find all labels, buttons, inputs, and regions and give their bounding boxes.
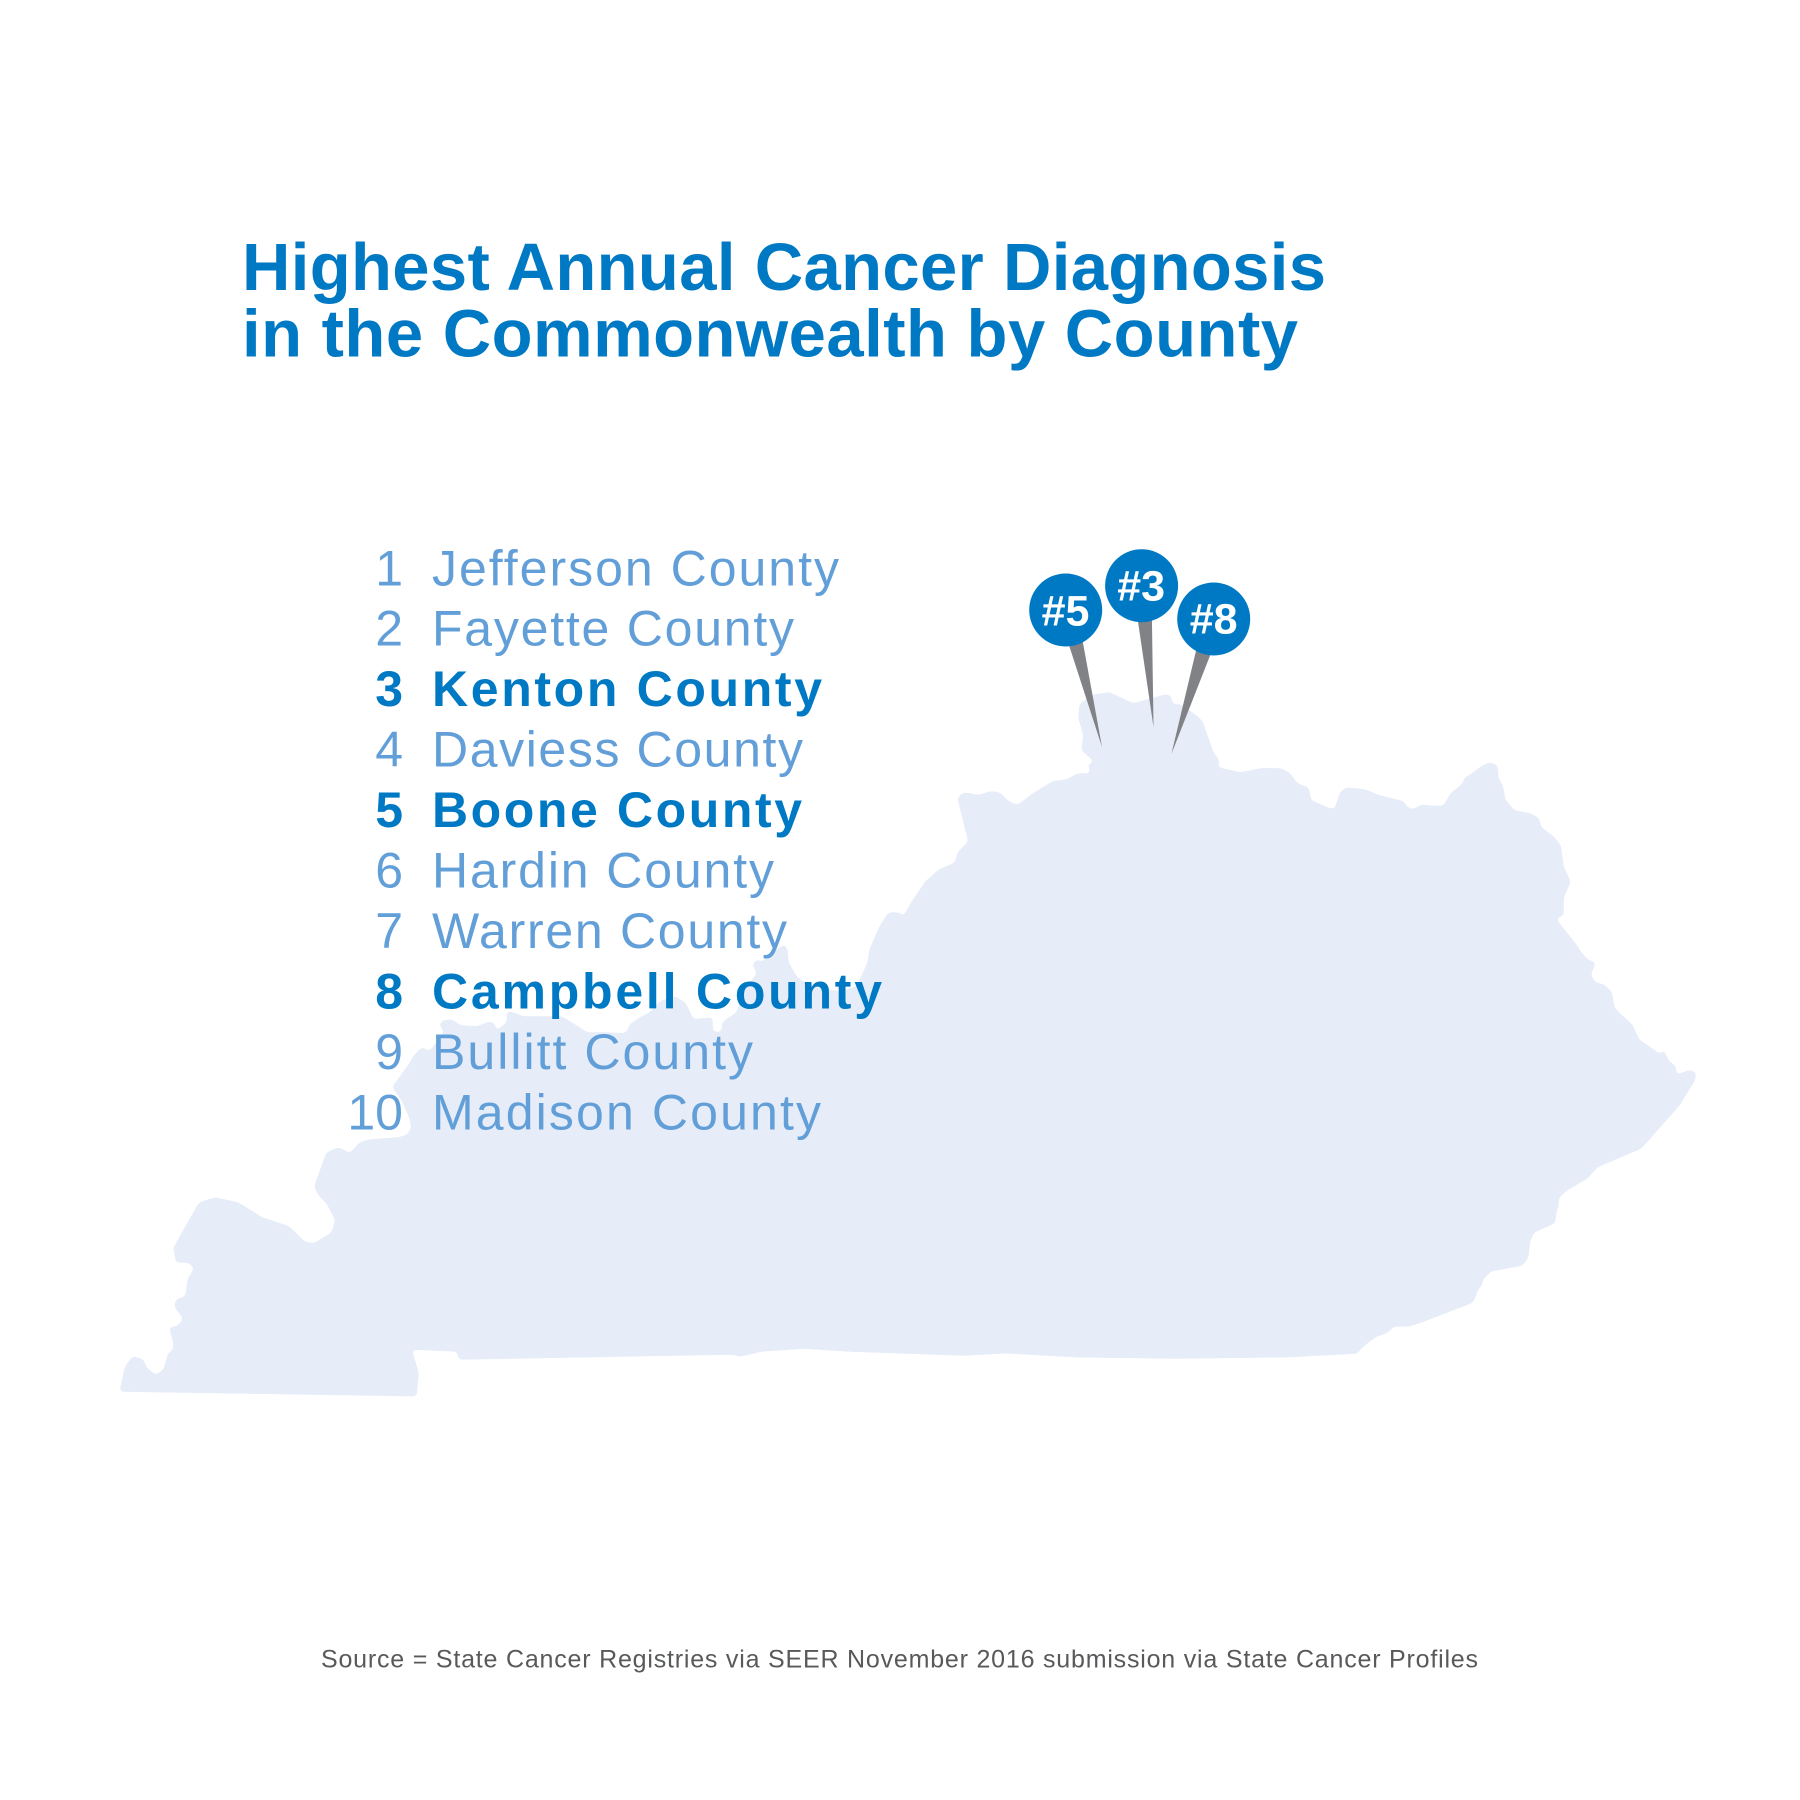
ranked county list	[347, 540, 882, 1140]
map pin: #8 Campbell: #8	[1190, 596, 1238, 644]
rank 10: Madison County: Madison County	[432, 1084, 821, 1140]
rank 6: Hardin County: Hardin County	[432, 842, 774, 898]
rank 10: Madison County: 10	[347, 1084, 403, 1140]
rank 2: Fayette County: 2	[375, 601, 403, 657]
title: in the Commonwealth by County	[242, 296, 1298, 372]
rank 5: Boone County: Boone County	[432, 782, 802, 838]
title: Highest Annual Cancer Diagnosis	[242, 230, 1326, 305]
map pin: #8 Campbell	[1171, 582, 1250, 754]
rank 3: Kenton County: 3	[375, 661, 403, 717]
map pin: #3 Kenton	[1105, 549, 1178, 727]
rank 8: Campbell County: Campbell County	[432, 963, 882, 1019]
rank 7: Warren County: Warren County	[432, 903, 787, 959]
rank 9: Bullitt County: Bullitt County	[432, 1024, 753, 1080]
map pin: #3 Kenton: #3	[1117, 562, 1165, 610]
rank 2: Fayette County: Fayette County	[432, 601, 794, 657]
rank 5: Boone County: 5	[375, 782, 403, 838]
rank 3: Kenton County: Kenton County	[432, 661, 822, 717]
rank 6: Hardin County: 6	[375, 842, 403, 898]
rank 9: Bullitt County: 9	[375, 1024, 403, 1080]
map: Kentucky silhouette	[120, 693, 1695, 1396]
rank 7: Warren County: 7	[375, 903, 403, 959]
rank 4: Daviess County: Daviess County	[432, 722, 803, 778]
map pin: #5 Boone: #5	[1042, 588, 1089, 636]
rank 1: Jefferson County: 1	[375, 540, 403, 596]
rank 4: Daviess County: 4	[375, 722, 403, 778]
source note: Source = State Cancer Registries via SEER November 2016 submission via State Cancer Profiles	[321, 1646, 1478, 1674]
rank 1: Jefferson County: Jefferson County	[432, 540, 839, 596]
map pin: #5 Boone	[1029, 574, 1102, 747]
title	[242, 230, 1326, 372]
rank 8: Campbell County: 8	[375, 963, 403, 1019]
